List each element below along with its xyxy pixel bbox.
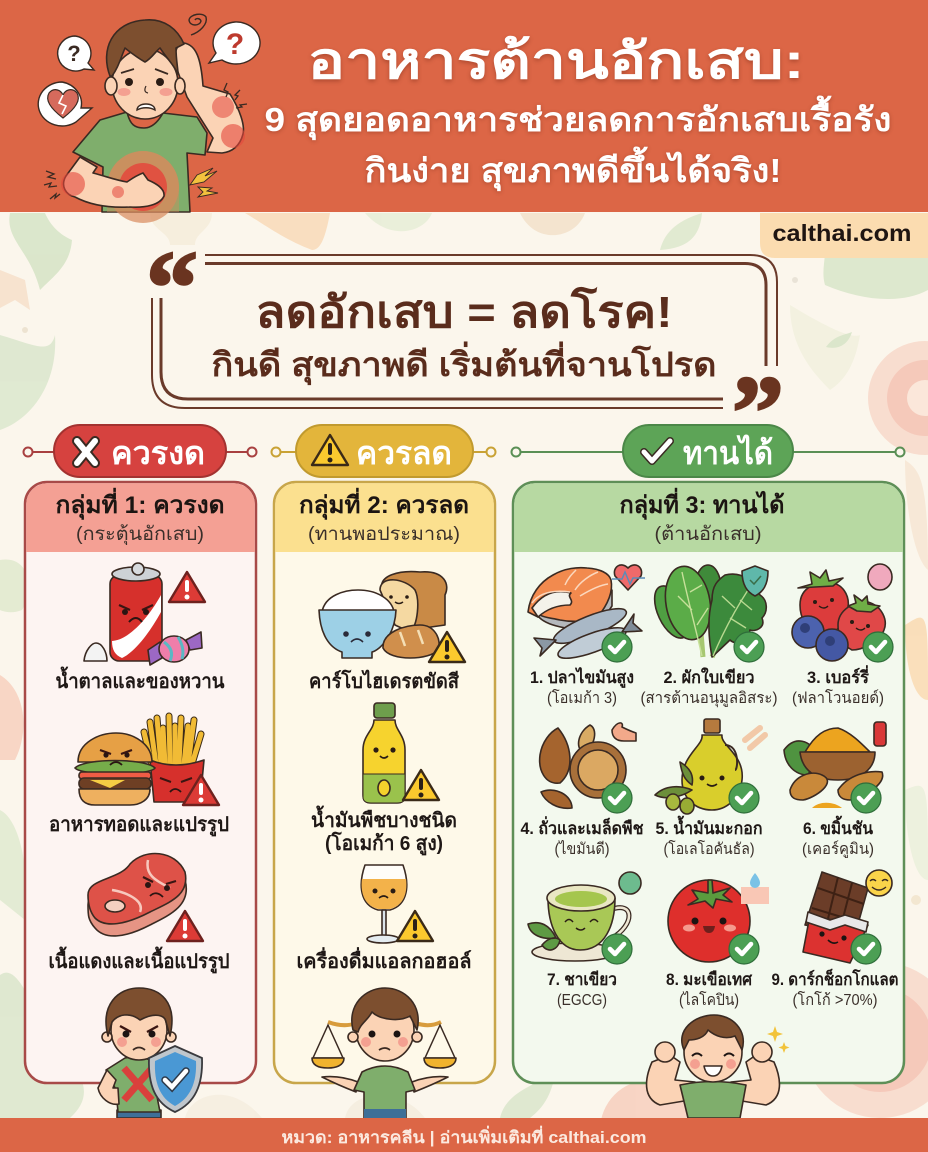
subtitle line 2: กินง่าย สุขภาพดีขึ้นได้จริง!	[364, 146, 782, 192]
character: flexing boy	[647, 1015, 790, 1118]
label: เนื้อแดงและเนื้อแปรรูป	[48, 946, 230, 975]
title: อาหารต้านอักเสบ:	[308, 33, 804, 89]
quote frame	[152, 255, 777, 408]
speech bubbles: ?	[67, 41, 81, 66]
label 3	[792, 665, 884, 707]
banner: ok: ทานได้	[683, 434, 773, 471]
body	[73, 112, 207, 212]
label 5: (โอเลโอคันธัล)	[664, 840, 754, 858]
label 5: 5. น้ำมันมะกอก	[656, 815, 762, 838]
item 2: leafy greens	[647, 563, 768, 662]
stomach glow	[107, 151, 179, 223]
label 2: 2. ผักใบเขียว	[664, 667, 754, 687]
label 9: 9. ดาร์กช็อกโกแลต	[772, 967, 898, 989]
label 7: (EGCG)	[557, 992, 607, 1009]
site tag	[760, 213, 928, 258]
pain marks	[190, 168, 218, 197]
banner: avoid: ควรงด	[111, 435, 205, 471]
item: alcohol	[361, 865, 433, 943]
label 6	[802, 815, 874, 859]
heading group 1: กลุ่มที่ 1: ควรงด	[56, 487, 224, 521]
panel: group 3 ok	[513, 482, 904, 1083]
left arm	[64, 157, 164, 207]
label 8: 8. มะเขือเทศ	[666, 969, 753, 989]
panel: group 1 avoid: (กระตุ้นอักเสบ)	[76, 524, 204, 546]
site tag: calthai.com	[772, 220, 912, 246]
label 9: (โกโก้ >70%)	[792, 991, 878, 1009]
panel: group 1 avoid	[25, 482, 256, 1083]
character: boy with scales	[312, 988, 456, 1118]
footer band	[0, 1118, 928, 1152]
banner: reduce: ควรลด	[356, 435, 452, 471]
label 2: (สารต้านอนุมูลอิสระ)	[640, 690, 778, 708]
panel: group 2 reduce	[274, 482, 495, 1083]
heading group 3: กลุ่มที่ 3: ทานได้	[620, 487, 784, 521]
quote marks	[146, 230, 784, 470]
label 7	[547, 969, 617, 1009]
item 7: green tea	[528, 872, 641, 964]
speech bubbles: ?	[226, 28, 244, 61]
label 8: (ไลโคปิน)	[679, 991, 739, 1009]
banner: ok	[512, 425, 904, 477]
label: คาร์โบไฮเดรตขัดสี	[309, 669, 460, 693]
item: rice and bread	[319, 572, 465, 662]
shield	[149, 1046, 202, 1112]
item 8: tomato	[668, 873, 769, 964]
panel: group 2 reduce: (ทานพอประมาณ)	[308, 524, 460, 545]
label 1: (โอเมก้า 3)	[547, 689, 617, 707]
item: vegetable oil	[363, 703, 439, 803]
panel: group 3 ok: (ต้านอักเสบ)	[654, 524, 762, 545]
heading group 2: กลุ่มที่ 2: ควรลด	[299, 487, 469, 521]
label 4	[520, 816, 644, 858]
label 2	[640, 667, 778, 708]
header band	[0, 0, 928, 212]
icon: cross	[77, 441, 95, 463]
item 6: turmeric	[784, 722, 886, 813]
label: เครื่องดื่มแอลกอฮอล์	[296, 946, 472, 973]
label 8	[666, 969, 753, 1009]
label: น้ำมันพืชบางชนิด	[311, 805, 457, 832]
item 3: berries	[792, 564, 893, 662]
icon: warning	[312, 435, 348, 465]
item 4: nuts	[540, 723, 636, 813]
subtitle line 1: 9 สุดยอดอาหารช่วยลดการอักเสบเรื้อรัง	[264, 95, 892, 141]
raised arm	[175, 43, 243, 153]
label 3: (ฟลาโวนอยด์)	[792, 689, 884, 707]
banner: avoid	[24, 425, 256, 477]
label 1	[530, 667, 634, 707]
label 4: (ไขมันดี)	[554, 840, 610, 858]
item 5: olive oil	[655, 719, 765, 814]
speech bubbles	[38, 14, 260, 126]
item: burger and fries	[75, 716, 219, 805]
head	[112, 49, 178, 119]
label 6: 6. ขมิ้นชัน	[803, 815, 873, 838]
quote marks: “	[146, 230, 198, 345]
label 3: 3. เบอร์รี่	[807, 665, 870, 687]
label 9	[772, 967, 898, 1009]
label 5	[656, 815, 762, 858]
item: red meat	[88, 854, 203, 941]
character: angry boy with shield	[98, 988, 202, 1118]
item 9: chocolate	[803, 870, 892, 964]
icon: check	[644, 441, 670, 461]
label second line: (โอเมก้า 6 สูง)	[325, 831, 443, 857]
illustration: inflamed man	[38, 14, 260, 223]
label 7: 7. ชาเขียว	[547, 969, 617, 989]
footer text: หมวด: อาหารคลีน | อ่านเพิ่มเติมที่ calthai.com	[282, 1125, 646, 1147]
item: soda and candy	[84, 563, 205, 665]
label 4: 4. ถั่วและเมล็ดพืช	[520, 816, 644, 838]
label 6: (เคอร์คูมิน)	[802, 840, 874, 859]
quote marks: ”	[732, 355, 784, 470]
label: อาหารทอดและแปรรูป	[49, 814, 229, 838]
item 1: salmon and sardines	[528, 565, 645, 664]
quote heading: ลดอักเสบ = ลดโรค!	[256, 285, 672, 337]
label 1: 1. ปลาไขมันสูง	[530, 667, 634, 689]
banner: reduce	[272, 425, 496, 477]
quote subheading: กินดี สุขภาพดี เริ่มต้นที่จานโปรด	[212, 341, 716, 386]
label: น้ำตาลและของหวาน	[56, 666, 225, 693]
